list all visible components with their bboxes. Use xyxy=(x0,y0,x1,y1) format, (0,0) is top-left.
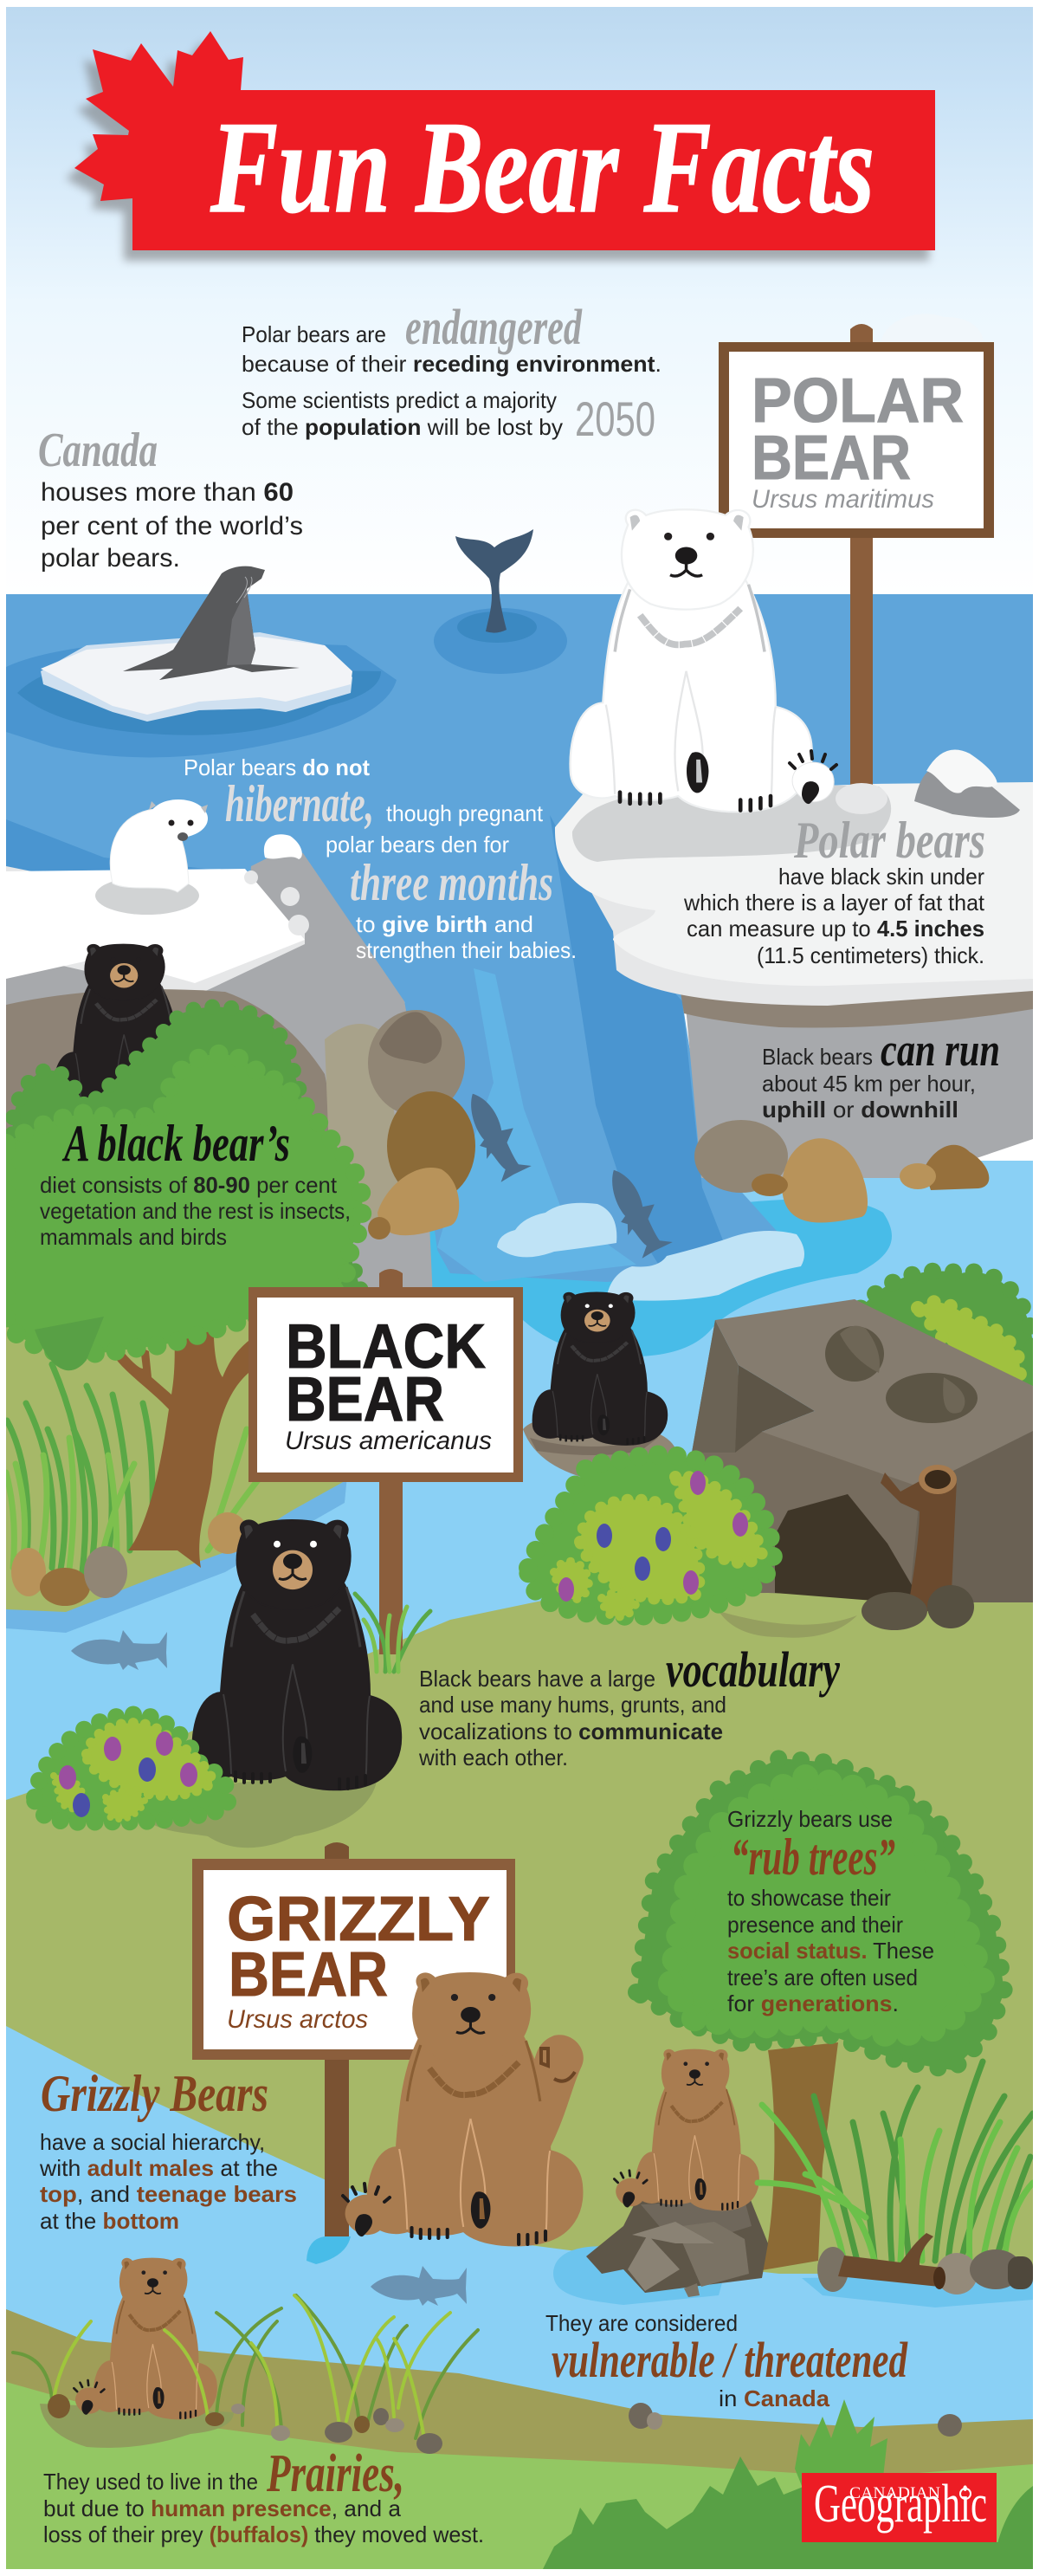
text: polar bears black skin: (11.5 centimeters) thick. xyxy=(757,942,984,968)
text: polar bears black skin xyxy=(683,812,985,968)
text: a black bear's diet xyxy=(40,1115,351,1250)
hollow stump xyxy=(862,1465,974,1630)
waterfall dark strip xyxy=(550,815,736,1273)
text: black bears can run xyxy=(763,1043,998,1123)
log and rocks xyxy=(817,2233,1033,2294)
text: grizzly hierarchy: with adult males at the xyxy=(39,2155,278,2181)
lower meadow xyxy=(6,2382,1033,2576)
foam xyxy=(497,1203,804,1301)
text: a black bear's diet: mammals and birds xyxy=(40,1224,227,1250)
icon: seal xyxy=(123,566,300,680)
pools around rocks xyxy=(553,2246,1033,2307)
text: polar bears black skin: have black skin under xyxy=(778,864,984,890)
icon: salmon leaping second xyxy=(612,1169,672,1259)
text: do not hibernate xyxy=(184,754,577,963)
text: Canada houses 60 percent: per cent of the world’s xyxy=(41,512,303,540)
icon: salmon leaping xyxy=(471,1093,532,1182)
text: do not hibernate: three months xyxy=(350,854,553,911)
text: polar bears are endangered: endangered xyxy=(405,299,583,355)
text: vulnerable threatened: They are considered xyxy=(545,2310,738,2336)
title banner shadow xyxy=(66,42,929,261)
berry bush large xyxy=(528,1454,773,1616)
icon: river fish xyxy=(71,1630,167,1670)
sign heading: Ursus maritimus xyxy=(752,485,934,514)
right cliff xyxy=(680,987,1033,1178)
sign heading: POLAR xyxy=(752,366,964,436)
shadow under berry bush xyxy=(719,1611,857,1638)
text: rub trees: to showcase their xyxy=(727,1885,891,1911)
text: prairies: loss of their prey (buffalos) they moved west. xyxy=(43,2521,484,2547)
mid grizzly bear xyxy=(614,2049,758,2210)
rock with snow on floe xyxy=(914,750,1020,818)
text: vulnerable threatened: in Canada xyxy=(719,2385,830,2411)
big polar bear xyxy=(571,509,836,812)
text: grizzly hierarchy: have a social hierarchy, xyxy=(40,2129,265,2155)
whale ripples xyxy=(434,608,567,674)
text: a black bear's diet: A black bear’s xyxy=(61,1115,290,1172)
low grizzly shadow xyxy=(40,2404,234,2448)
grizzly boulders xyxy=(586,2200,768,2297)
text: rub trees: tree’s are often used xyxy=(727,1964,918,1990)
text: prairies: They used to live in the xyxy=(43,2469,258,2495)
ice floe with seal xyxy=(41,566,352,722)
left cliff snow xyxy=(6,866,309,996)
land left bank edge xyxy=(6,1482,346,1633)
cave rock xyxy=(675,1299,1033,1603)
big bear shadow xyxy=(142,1767,378,1848)
text: grizzly hierarchy xyxy=(39,2065,297,2234)
text: rub trees: “rub trees” xyxy=(731,1828,895,1886)
sky background xyxy=(6,7,1033,471)
text: vocabulary xyxy=(418,1641,840,1770)
sign heading xyxy=(753,378,963,508)
sign post xyxy=(850,324,873,793)
text: prairies xyxy=(43,2444,484,2547)
black sign xyxy=(248,1269,523,1654)
text: polar bears are endangered: Polar bears are xyxy=(242,321,386,347)
text: black bears can run: can run xyxy=(881,1024,1000,1076)
text: black bears can run: about 45 km per hour, xyxy=(762,1071,976,1097)
big black bear xyxy=(192,1520,401,1790)
pale river base xyxy=(6,1161,1033,1800)
small river rocks xyxy=(48,2394,962,2454)
mid black bear xyxy=(532,1292,668,1445)
text: vocabulary: vocabulary xyxy=(666,1641,840,1698)
text: do not hibernate: though pregnant xyxy=(386,800,544,826)
text: polar bears are endangered: 2050 xyxy=(575,392,655,446)
text: polar bears are endangered xyxy=(242,308,660,440)
big grizzly bear xyxy=(343,1973,584,2245)
right grass clump xyxy=(758,2061,1033,2261)
hillside land xyxy=(6,1559,1033,2339)
rocks at tree base xyxy=(11,1512,248,1606)
bright pool xyxy=(429,1200,892,1356)
left water shadow xyxy=(6,819,208,871)
text: Canada houses 60 percent: houses more than 60 xyxy=(41,478,294,507)
rub tree foliage xyxy=(636,1758,1004,2070)
Canadian Geographic logo: CANADIAN xyxy=(849,2484,940,2502)
text: grizzly hierarchy: Grizzly Bears xyxy=(41,2065,268,2122)
land left bank xyxy=(6,1299,364,1612)
text: rub trees: presence and their xyxy=(727,1912,903,1938)
berry bush small xyxy=(35,1714,229,1822)
text: do not hibernate: Polar bears do not xyxy=(184,754,370,780)
small black bear xyxy=(56,944,173,1098)
text: Canada houses 60 percent xyxy=(38,424,303,573)
sign heading: BEAR xyxy=(229,1940,388,2010)
brown rock band xyxy=(6,989,328,1131)
reeds xyxy=(13,2295,478,2438)
deep water under left floe xyxy=(17,665,381,735)
sign heading: Ursus americanus xyxy=(285,1427,492,1455)
text: grizzly hierarchy: top, and teenage bears xyxy=(40,2181,297,2207)
right upper bush xyxy=(849,1272,1033,1403)
text: a black bear's diet: vegetation and the rest is insects, xyxy=(40,1198,351,1224)
Canadian Geographic logo xyxy=(802,2473,997,2542)
text: polar bears are endangered: of the population will be lost by xyxy=(242,414,563,440)
snow mound behind polar sign xyxy=(881,314,984,344)
peak snow cap xyxy=(264,834,302,859)
text: rub trees: social status. These xyxy=(727,1938,934,1964)
left tree xyxy=(106,1299,248,1568)
small polar bear xyxy=(95,799,208,915)
sign post xyxy=(325,1842,349,2239)
sign heading: BEAR xyxy=(286,1365,444,1434)
text: grizzly hierarchy: at the bottom xyxy=(40,2208,179,2234)
raised polar paw xyxy=(790,751,836,804)
text: vulnerable threatened: vulnerable / threatened xyxy=(552,2332,908,2388)
text: rub trees: for generations. xyxy=(727,1990,899,2016)
text: black bears can run: Black bears xyxy=(762,1044,873,1070)
text: Canada houses 60 percent: Canada xyxy=(38,424,158,477)
icon: river fish lower xyxy=(371,2266,467,2306)
sign heading: BLACK xyxy=(286,1312,486,1382)
raised arm with paw xyxy=(528,2035,584,2148)
text: rub trees: Grizzly bears use xyxy=(727,1806,893,1832)
dark water under left floe xyxy=(6,639,397,757)
text: vulnerable threatened xyxy=(545,2310,908,2411)
bottom right bushes xyxy=(543,2399,1033,2569)
text: prairies: Prairies, xyxy=(266,2444,404,2503)
text: polar bears black skin: Polar bears xyxy=(793,812,985,869)
title banner with maple leaf xyxy=(74,31,935,250)
left grass clump xyxy=(6,1364,264,1572)
sign post xyxy=(379,1269,403,1654)
text: do not hibernate: to give birth and xyxy=(356,911,533,937)
waterfall light strip xyxy=(437,968,636,1282)
lower bank xyxy=(6,2309,1033,2576)
left cliff rock xyxy=(6,849,433,1299)
text: do not hibernate: polar bears den for xyxy=(326,832,509,858)
sign heading: Ursus arctos xyxy=(227,2005,368,2034)
rub tree trunk xyxy=(762,2042,838,2270)
text: polar bears black skin: can measure up to 4.5 inches xyxy=(687,916,984,942)
text: rub trees xyxy=(727,1806,934,2016)
polar sign xyxy=(719,324,994,814)
sign heading xyxy=(227,1885,490,2034)
text: vocabulary: vocalizations to communicate xyxy=(419,1718,723,1744)
text: polar bears are endangered: Some scientists predict a majority xyxy=(242,387,557,413)
low grizzly bear xyxy=(74,2258,216,2419)
text: vocabulary: and use many hums, grunts, and xyxy=(419,1692,726,1718)
sea xyxy=(6,594,1033,1282)
text: vocabulary: Black bears have a large xyxy=(419,1666,655,1692)
mid rock island xyxy=(523,1418,677,1481)
text: polar bears black skin: which there is a layer of fat that xyxy=(683,890,985,916)
right ice floe xyxy=(555,782,1033,1006)
sign heading xyxy=(285,1312,492,1455)
sign heading: GRIZZLY xyxy=(227,1885,490,1954)
small grass by sign xyxy=(355,1594,430,1672)
text: vocabulary: with each other. xyxy=(418,1744,568,1770)
sign heading: BEAR xyxy=(752,424,911,493)
text: a black bear's diet: diet consists of 80-90 per cent xyxy=(40,1172,338,1198)
text: polar bears are endangered: because of their receding environment . xyxy=(242,351,661,377)
left foliage xyxy=(6,1006,364,1370)
text: prairies: but due to human presence, and a xyxy=(43,2495,402,2521)
text: Canada houses 60 percent: polar bears. xyxy=(41,544,180,573)
text: do not hibernate: hibernate, xyxy=(225,775,374,832)
grizzly sign xyxy=(192,1842,515,2264)
river lower xyxy=(6,2026,1033,2477)
text: do not hibernate: strengthen their babies. xyxy=(356,937,577,963)
cave opening xyxy=(775,1494,914,1603)
rock pile left xyxy=(325,1010,475,1239)
boulders right xyxy=(694,1120,989,1223)
text: black bears can run: uphill or downhill xyxy=(762,1097,958,1123)
icon: whale tail xyxy=(455,529,533,633)
